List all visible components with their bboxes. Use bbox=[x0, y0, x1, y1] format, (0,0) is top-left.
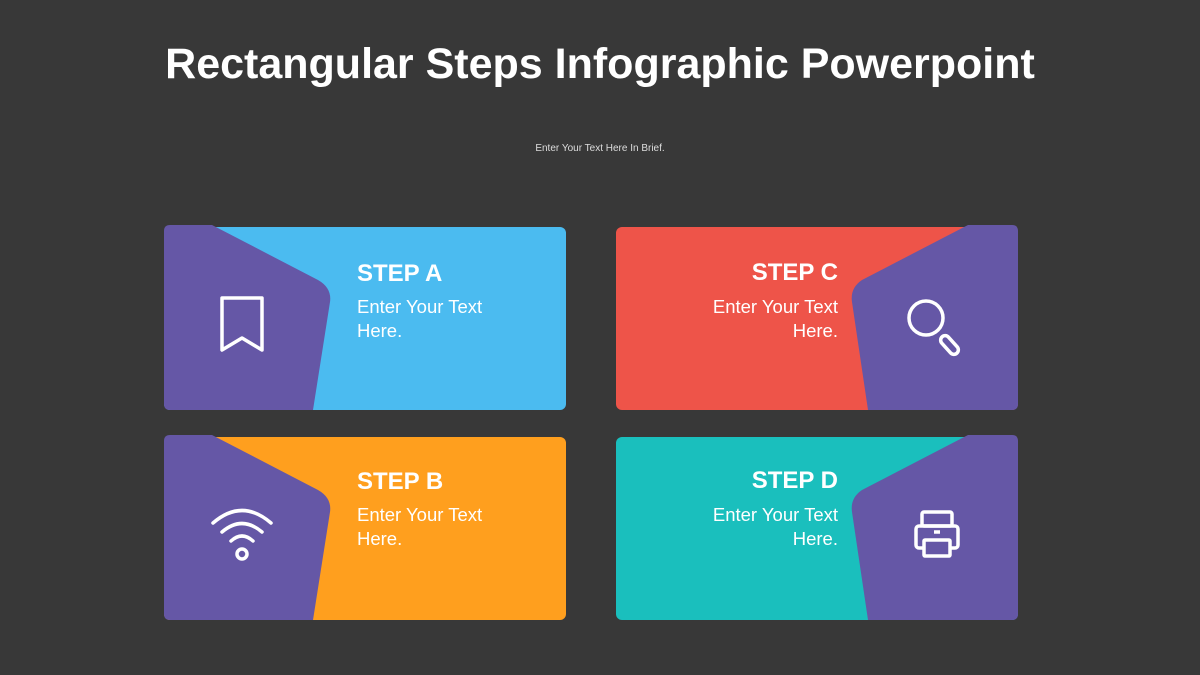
panel: step D: Here. bbox=[793, 528, 838, 549]
panel: step A: Here. bbox=[357, 320, 402, 341]
text D: Enter Your Text bbox=[713, 504, 838, 525]
subtitle: Enter Your Text Here In Brief. bbox=[535, 143, 665, 154]
panel: step C bbox=[616, 225, 1018, 410]
text A: Enter Your Text bbox=[357, 296, 482, 317]
title: Rectangular Steps Infographic Powerpoint bbox=[165, 40, 1035, 88]
text C: Enter Your Text bbox=[713, 296, 838, 317]
panel: step B: Here. bbox=[357, 528, 402, 549]
purple shape D bbox=[852, 435, 1018, 620]
heading D: STEP D bbox=[752, 467, 838, 494]
panel: step B bbox=[164, 435, 566, 620]
icon: printer bbox=[916, 512, 958, 556]
purple shape A bbox=[164, 225, 330, 410]
purple shape B bbox=[164, 435, 330, 620]
icon: bookmark bbox=[222, 298, 262, 350]
heading C: STEP C bbox=[752, 259, 838, 286]
icon: magnifier bbox=[909, 301, 960, 356]
text B: Enter Your Text bbox=[357, 504, 482, 525]
panel: step C: Here. bbox=[793, 320, 838, 341]
panel: step D bbox=[616, 435, 1018, 620]
heading B: STEP B bbox=[357, 468, 443, 495]
heading A: STEP A bbox=[357, 260, 442, 287]
panel: step A bbox=[164, 225, 566, 410]
purple shape C bbox=[852, 225, 1018, 410]
icon: wifi bbox=[213, 510, 271, 559]
